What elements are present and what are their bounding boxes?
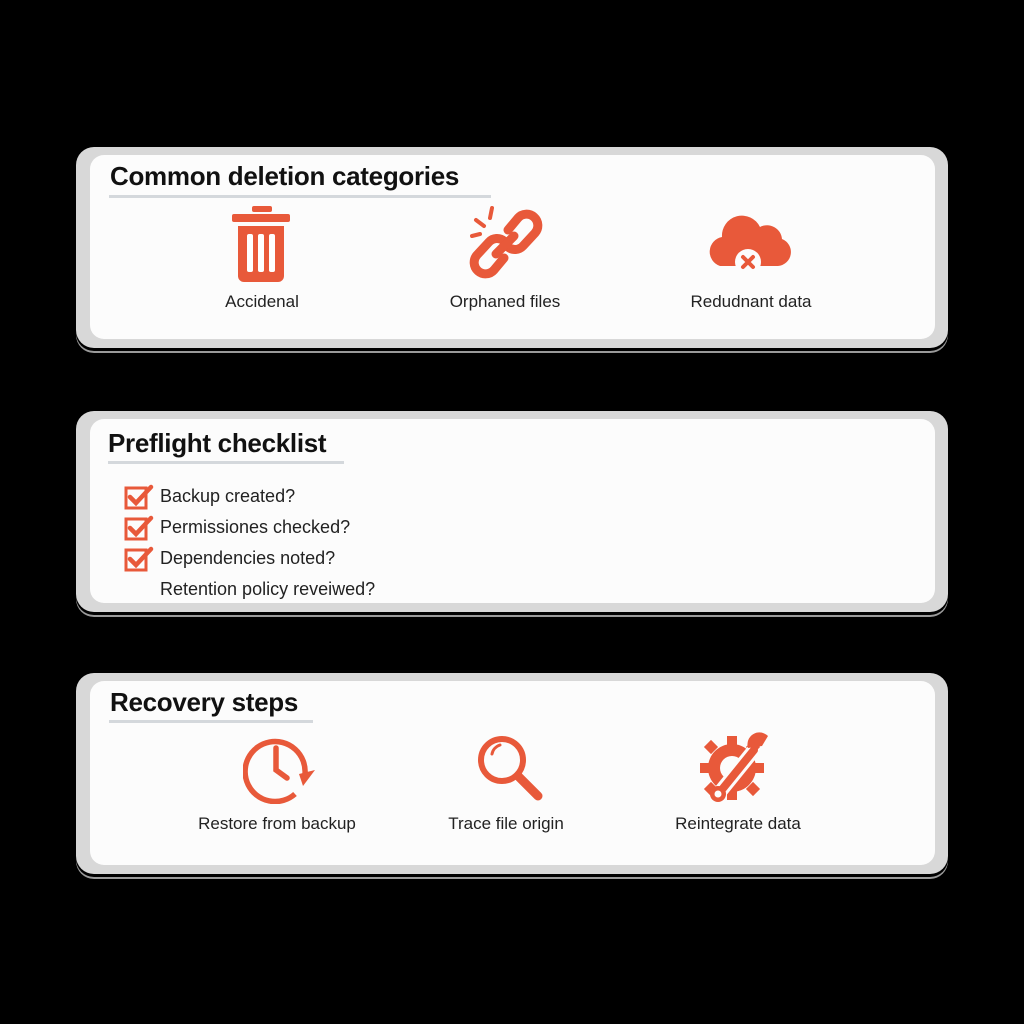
checklist item 4: Retention policy reveiwed? — [160, 579, 375, 599]
label: accidenal: Accidenal — [225, 292, 299, 311]
icon: clock restore — [243, 738, 315, 804]
label: redudnant data: Redudnant data — [690, 292, 812, 311]
icon: cloud with x — [710, 216, 791, 270]
checklist item 2 — [124, 516, 350, 540]
icon: magnifier — [478, 736, 542, 800]
label: trace file origin: Trace file origin — [448, 814, 564, 833]
icon: trash — [232, 206, 290, 282]
label: restore from backup: Restore from backup — [198, 814, 356, 833]
checklist item 3: Dependencies noted? — [160, 548, 335, 568]
checklist item 1: Backup created? — [160, 486, 295, 506]
panel: preflight checklist — [76, 411, 948, 612]
heading: preflight checklist: Preflight checklist — [108, 428, 326, 458]
label: orphaned files: Orphaned files — [450, 292, 560, 311]
icon: broken link — [470, 206, 542, 278]
panel: common deletion categories — [76, 147, 948, 348]
heading: recovery steps: Recovery steps — [110, 687, 298, 717]
icon: gear and wrench — [700, 732, 768, 802]
checklist item 2: Permissiones checked? — [160, 517, 350, 537]
label: reintegrate data: Reintegrate data — [675, 814, 801, 833]
heading: common deletion categories: Common deletion categories — [110, 161, 459, 191]
panel: recovery steps — [76, 673, 948, 874]
checklist item 3 — [124, 546, 335, 572]
checklist item 1 — [124, 484, 295, 510]
